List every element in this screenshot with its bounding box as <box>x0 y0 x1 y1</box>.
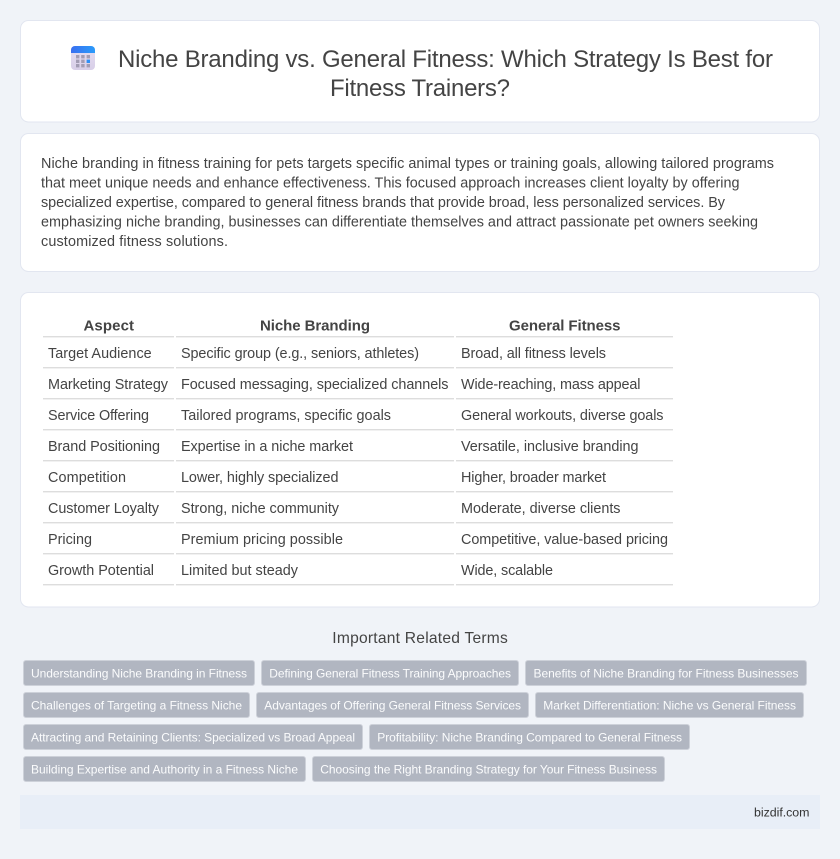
row: service offering <box>43 408 673 430</box>
title: Niche Branding vs. General Fitness: Which Strategy Is Best for <box>118 46 773 73</box>
row: service offering: Service Offering <box>48 408 149 424</box>
row: target audience: Broad, all fitness levels <box>461 346 606 362</box>
tag: benefits of niche branding <box>526 660 806 686</box>
tag: profitability: Profitability: Niche Branding Compared to General Fitness <box>377 730 682 744</box>
row: marketing strategy <box>43 377 673 399</box>
row: growth potential: Limited but steady <box>181 563 299 579</box>
tag: benefits of niche branding: Benefits of Niche Branding for Fitness Businesses <box>534 666 798 680</box>
table header row: Niche Branding <box>260 318 370 334</box>
row: customer loyalty: Customer Loyalty <box>48 501 160 517</box>
row: marketing strategy: Marketing Strategy <box>48 377 169 393</box>
row: brand positioning <box>43 439 673 461</box>
icon: calendar <box>71 46 95 70</box>
row: competition <box>43 470 673 492</box>
footer source: bizdif.com <box>754 806 810 820</box>
row: pricing <box>43 532 673 554</box>
row: pricing: Premium pricing possible <box>181 532 343 548</box>
tag: understanding niche branding: Understanding Niche Branding in Fitness <box>31 666 247 680</box>
text block: description paragraph <box>41 156 774 250</box>
table header row <box>43 318 673 337</box>
row: growth potential <box>43 563 673 585</box>
tag: defining general fitness: Defining General Fitness Training Approaches <box>269 666 511 680</box>
row: service offering: General workouts, diverse goals <box>461 408 664 424</box>
row: growth potential: Wide, scalable <box>461 563 553 579</box>
row: pricing: Pricing <box>48 532 92 548</box>
tag: attracting and retaining clients: Attracting and Retaining Clients: Specialized vs Broad Appeal <box>31 730 355 744</box>
tag: challenges of targeting <box>24 692 250 718</box>
tag: challenges of targeting: Challenges of Targeting a Fitness Niche <box>31 698 242 712</box>
table header row: General Fitness <box>509 318 620 334</box>
row: target audience: Specific group (e.g., seniors, athletes) <box>181 346 419 362</box>
row: customer loyalty <box>43 501 673 523</box>
tag: building expertise <box>24 756 306 782</box>
row: pricing: Competitive, value-based pricing <box>461 532 668 548</box>
tag: advantages of general fitness <box>256 692 528 718</box>
row: brand positioning: Versatile, inclusive branding <box>461 439 638 455</box>
tag: building expertise: Building Expertise and Authority in a Fitness Niche <box>31 762 298 776</box>
row: marketing strategy: Focused messaging, specialized channels <box>181 377 448 393</box>
text block: description paragraph: that meet unique needs and enhance effectiveness. This focused approach increases client loyalty by offering <box>41 176 740 192</box>
heading: important related terms: Important Related Terms <box>332 630 508 647</box>
text block: description paragraph: Niche branding in fitness training for pets targets specific animal types or training goals, allowing tailored programs <box>41 156 774 172</box>
row: customer loyalty: Moderate, diverse clients <box>461 501 620 517</box>
tag: attracting and retaining clients <box>24 724 362 750</box>
row: competition: Lower, highly specialized <box>181 470 338 486</box>
text block: description paragraph: specialized expertise, compared to general fitness brands that provide broad, less personalized services. By <box>41 195 726 211</box>
title <box>118 46 773 102</box>
panel: description <box>20 134 820 272</box>
row: growth potential: Growth Potential <box>48 563 154 579</box>
text block: description paragraph: customized fitness solutions. <box>41 234 228 250</box>
tag: profitability <box>370 724 690 750</box>
table header row: Aspect <box>84 318 134 334</box>
panel: comparison table <box>20 292 820 607</box>
row: marketing strategy: Wide-reaching, mass appeal <box>461 377 640 393</box>
row: brand positioning: Expertise in a niche market <box>181 439 353 455</box>
related terms tags <box>24 660 806 782</box>
tag: market differentiation: Market Differentiation: Niche vs General Fitness <box>543 698 796 712</box>
row: competition: Competition <box>48 470 126 486</box>
tag: choosing branding strategy: Choosing the Right Branding Strategy for Your Fitness Business <box>320 762 657 776</box>
tag: understanding niche branding <box>24 660 254 686</box>
footer <box>20 795 820 829</box>
panel: title header <box>20 20 820 122</box>
tag: choosing branding strategy <box>312 756 664 782</box>
row: target audience: Target Audience <box>48 346 152 362</box>
row: competition: Higher, broader market <box>461 470 606 486</box>
text block: description paragraph: emphasizing niche branding, businesses can differentiate themselves and attract passionate pet owners seeking <box>41 214 758 230</box>
tag: defining general fitness <box>262 660 518 686</box>
title: Fitness Trainers? <box>330 75 510 102</box>
row: brand positioning: Brand Positioning <box>48 439 160 455</box>
tag: advantages of general fitness: Advantages of Offering General Fitness Services <box>264 698 521 712</box>
row: target audience <box>43 346 673 368</box>
row: customer loyalty: Strong, niche community <box>181 501 340 517</box>
tag: market differentiation <box>536 692 804 718</box>
row: service offering: Tailored programs, specific goals <box>181 408 391 424</box>
